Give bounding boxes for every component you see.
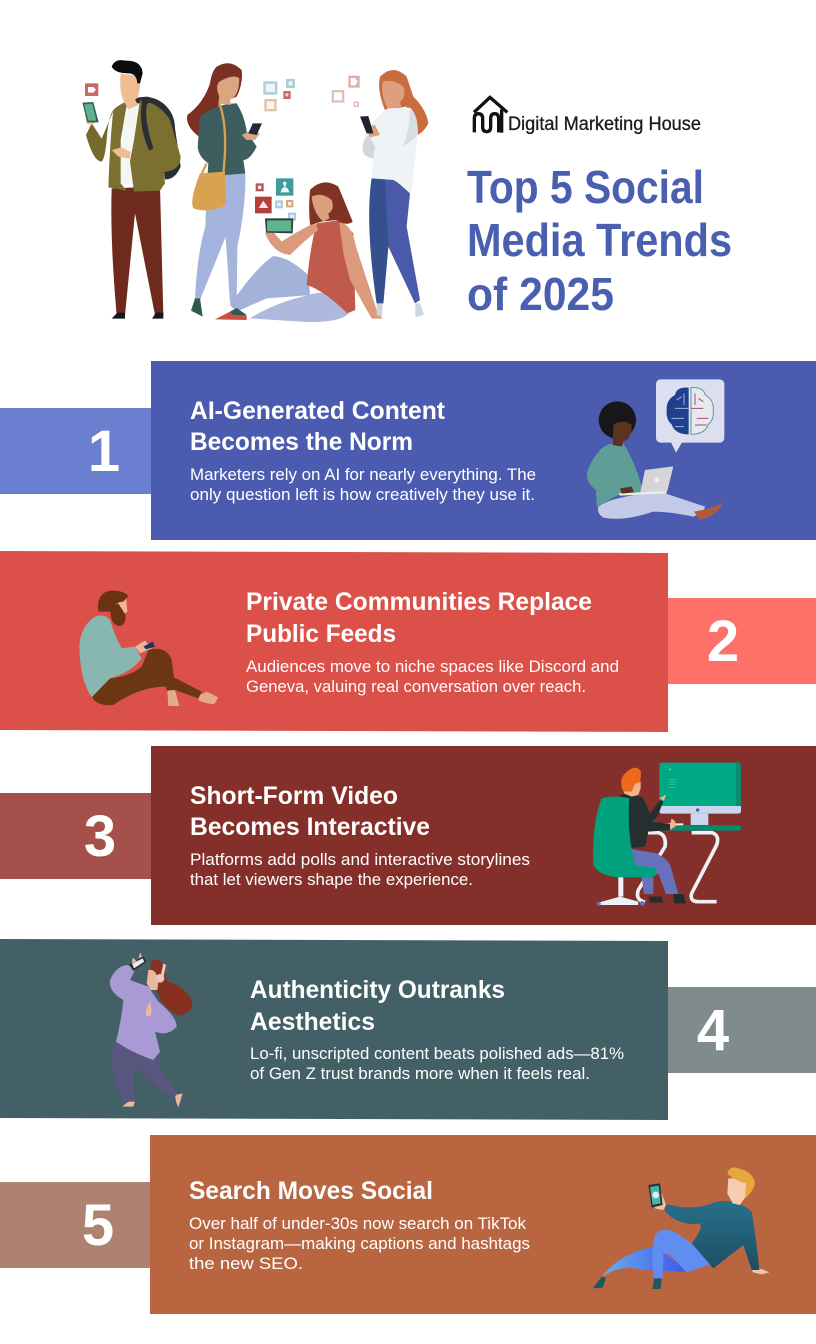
heading 1: AI-Generated Content	[190, 397, 446, 425]
banner 1	[151, 361, 816, 540]
heading 4: Aesthetics	[250, 1008, 375, 1036]
logo wordmark: Digital Marketing House	[508, 113, 701, 135]
heading 1: Becomes the Norm	[190, 428, 413, 456]
heading 4: Authenticity Outranks	[250, 976, 505, 1004]
panel: trend 3	[0, 746, 816, 925]
body 2: Audiences move to niche spaces like Discord and	[246, 658, 619, 676]
body 5: Over half of under-30s now search on TikTok	[189, 1215, 527, 1233]
body 3: Platforms add polls and interactive storylines	[190, 851, 530, 869]
icon: person at desktop computer	[593, 763, 741, 906]
title	[467, 161, 732, 320]
body 3	[190, 851, 530, 889]
body 5: or Instagram—making captions and hashtags	[189, 1235, 530, 1253]
heading 3	[190, 782, 430, 841]
banner 3	[151, 746, 816, 925]
number tab 4	[668, 987, 816, 1073]
body 1: only question left is how creatively they use it.	[190, 486, 535, 504]
heading 4	[250, 976, 505, 1036]
body 5: the new SEO.	[189, 1255, 303, 1273]
number tab 2: 2	[707, 609, 739, 674]
number tab 2	[667, 598, 816, 684]
heading 3: Short-Form Video	[190, 782, 398, 810]
panel: trend 1	[0, 361, 816, 540]
title: Media Trends	[467, 214, 732, 266]
body 2	[246, 658, 619, 696]
body 5	[189, 1215, 530, 1273]
banner 4	[0, 939, 668, 1120]
logo: Digital Marketing House	[474, 97, 701, 135]
figure: man with backpack	[82, 60, 181, 319]
illustration: four people using phones	[82, 60, 428, 322]
panel: trend 5	[0, 1135, 816, 1314]
number tab 1	[0, 408, 152, 494]
figure: woman with shoulder bag	[187, 63, 262, 317]
figure: standing woman in white top	[360, 70, 428, 317]
number tab 1: 1	[88, 419, 120, 484]
body 4: Lo-fi, unscripted content beats polished ads—81%	[250, 1045, 624, 1063]
banner 2	[0, 551, 668, 732]
icon: bearded man seated with phone	[79, 591, 218, 706]
banner 5	[150, 1135, 816, 1314]
heading 3: Becomes Interactive	[190, 813, 430, 841]
body 4: of Gen Z trust brands more when it feels real.	[250, 1065, 590, 1083]
number tab 4: 4	[697, 998, 729, 1063]
heading 2	[246, 588, 592, 648]
icon: reclining man holding phone	[593, 1167, 769, 1289]
title: Top 5 Social	[467, 161, 704, 213]
body 1	[190, 466, 536, 504]
body 4	[250, 1045, 624, 1083]
body 2: Geneva, valuing real conversation over reach.	[246, 678, 586, 696]
heading 1	[190, 397, 446, 456]
number tab 5: 5	[82, 1193, 114, 1258]
body 3: that let viewers shape the experience.	[190, 871, 473, 889]
app icons: floating group right	[332, 76, 360, 107]
figure: seated woman with tablet	[215, 182, 382, 322]
title: of 2025	[467, 268, 614, 320]
icon: person with laptop and AI brain bubble	[587, 379, 724, 520]
logo mark: house	[474, 97, 507, 133]
number tab 5	[0, 1182, 150, 1268]
heading 5: Search Moves Social	[189, 1177, 433, 1205]
icon: woman with headphones taking a selfie	[110, 952, 193, 1108]
panel: trend 4	[0, 939, 816, 1120]
body 1: Marketers rely on AI for nearly everything. The	[190, 466, 536, 484]
number tab 3	[0, 793, 152, 879]
panel: trend 2	[0, 551, 816, 732]
number tab 3: 3	[84, 804, 116, 869]
heading 2: Private Communities Replace	[246, 588, 592, 616]
app icons: floating group center	[255, 79, 296, 221]
heading 2: Public Feeds	[246, 620, 396, 648]
